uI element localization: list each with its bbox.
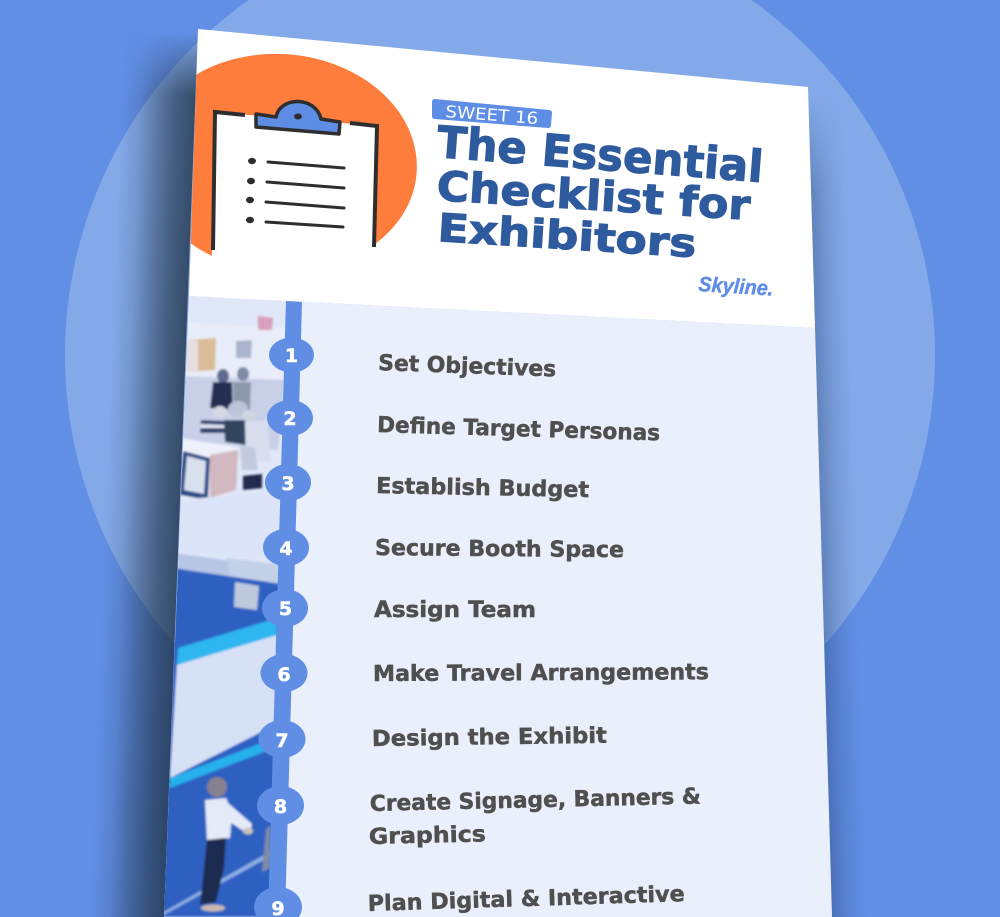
title: The Essential [435, 117, 765, 193]
checklist items: Establish Budget [376, 474, 590, 503]
person [200, 777, 253, 912]
card shadow [97, 36, 858, 917]
step markers: 2 [283, 408, 297, 430]
step markers: 5 [279, 598, 292, 620]
step markers [254, 338, 314, 917]
panel: header [189, 29, 815, 328]
step markers: 7 [275, 730, 289, 752]
photo strip: trade show booth [164, 296, 286, 917]
title [435, 117, 765, 267]
step markers: 1 [285, 345, 298, 367]
checklist items: Design the Exhibit [372, 724, 608, 752]
step markers: 8 [274, 796, 287, 818]
background circle [65, 0, 935, 790]
icon: clipboard on orange circle [190, 54, 417, 300]
checklist items: Graphics [369, 822, 486, 850]
step markers: 3 [281, 473, 295, 495]
checklist items: Assign Team [374, 598, 536, 623]
badge: Sweet 16 [432, 99, 552, 128]
panel: checklist body [164, 296, 832, 917]
timeline spine [268, 300, 302, 917]
title: Exhibitors [436, 206, 698, 267]
checklist items: Set Objectives [378, 351, 557, 383]
badge: Sweet 16: SWEET 16 [445, 102, 539, 128]
step markers: 6 [277, 664, 291, 686]
checklist items: Plan Digital & Interactive [367, 882, 685, 917]
checklist items [367, 351, 709, 917]
checklist items: Define Target Personas [377, 413, 660, 446]
title: Checklist for [435, 162, 753, 230]
checklist items: Secure Booth Space [375, 536, 624, 563]
checklist items: Create Signage, Banners & [370, 784, 701, 817]
checklist items: Make Travel Arrangements [373, 660, 709, 687]
step markers: 4 [279, 538, 293, 560]
logo: Skyline: Skyline. [698, 273, 774, 301]
